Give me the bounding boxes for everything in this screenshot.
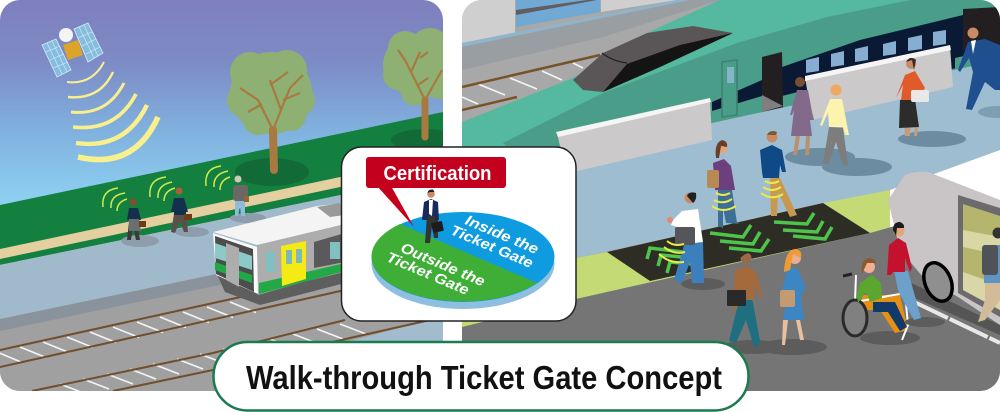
windows xyxy=(806,30,946,73)
tree xyxy=(383,28,443,146)
icon: body signal waves xyxy=(659,241,685,262)
label: outside the ticket gate: Ticket Gate xyxy=(384,250,471,299)
label: inside the ticket gate xyxy=(448,213,541,272)
person: passenger boarding bus xyxy=(978,228,1000,322)
person: wheelchair user xyxy=(843,258,920,345)
ground xyxy=(462,226,1000,391)
rail ties xyxy=(0,302,366,394)
gate mat xyxy=(607,203,870,281)
direction chevrons xyxy=(647,213,832,273)
person: woman in orange xyxy=(896,58,966,147)
local train xyxy=(213,203,345,305)
person: man in white shirt with bag xyxy=(667,192,725,290)
shinkansen train xyxy=(462,0,1000,147)
panel: outside scene xyxy=(0,0,464,394)
track xyxy=(462,55,600,110)
embankment xyxy=(0,112,443,265)
tree xyxy=(227,50,315,186)
station building xyxy=(462,0,677,43)
icon: satellite xyxy=(42,23,103,77)
icon: phone signal waves xyxy=(103,166,230,211)
person: businessman xyxy=(171,188,209,237)
wheel xyxy=(922,261,954,303)
platform xyxy=(0,195,341,319)
callout: certification: Certification xyxy=(384,163,492,185)
person: woman in mauve dress xyxy=(785,77,855,166)
person: man in yellow shirt xyxy=(820,84,892,176)
icon: satellite signal waves xyxy=(67,62,158,160)
panel: station scene xyxy=(462,0,1000,391)
label: inside the ticket gate: Inside the xyxy=(463,213,541,258)
inset panel: certification diagram xyxy=(342,147,576,321)
person: woman in blue dress xyxy=(757,249,827,355)
rails xyxy=(0,290,428,391)
white wedge xyxy=(890,150,1000,228)
person: elderly man xyxy=(230,176,266,223)
icon: body signal waves xyxy=(712,181,783,210)
platform wall xyxy=(556,98,712,172)
title banner: Walk-through Ticket Gate Concept xyxy=(246,359,722,396)
person: man in blue suit xyxy=(958,28,1000,118)
title banner xyxy=(214,342,748,410)
windscreen xyxy=(573,26,733,92)
disc xyxy=(371,212,554,309)
footpath xyxy=(0,176,345,259)
callout: certification xyxy=(366,157,506,227)
person: man in red sweater xyxy=(887,222,945,327)
label: inside the ticket gate: Ticket Gate xyxy=(448,223,535,272)
person: man in blue sweater xyxy=(760,131,797,217)
person: man in brown xyxy=(723,252,783,354)
walkway xyxy=(576,66,1000,258)
platform strip xyxy=(462,0,690,47)
door xyxy=(722,60,737,117)
tactile strip xyxy=(462,190,890,330)
label: outside the ticket gate xyxy=(384,240,487,299)
person: schoolgirl xyxy=(121,198,159,247)
bus xyxy=(888,172,1000,343)
person: woman with tan bag xyxy=(707,140,741,228)
label: outside the ticket gate: Outside the xyxy=(398,240,487,290)
person: businessman on disc xyxy=(422,189,444,243)
track bed xyxy=(0,272,341,391)
platform wall xyxy=(805,45,953,120)
